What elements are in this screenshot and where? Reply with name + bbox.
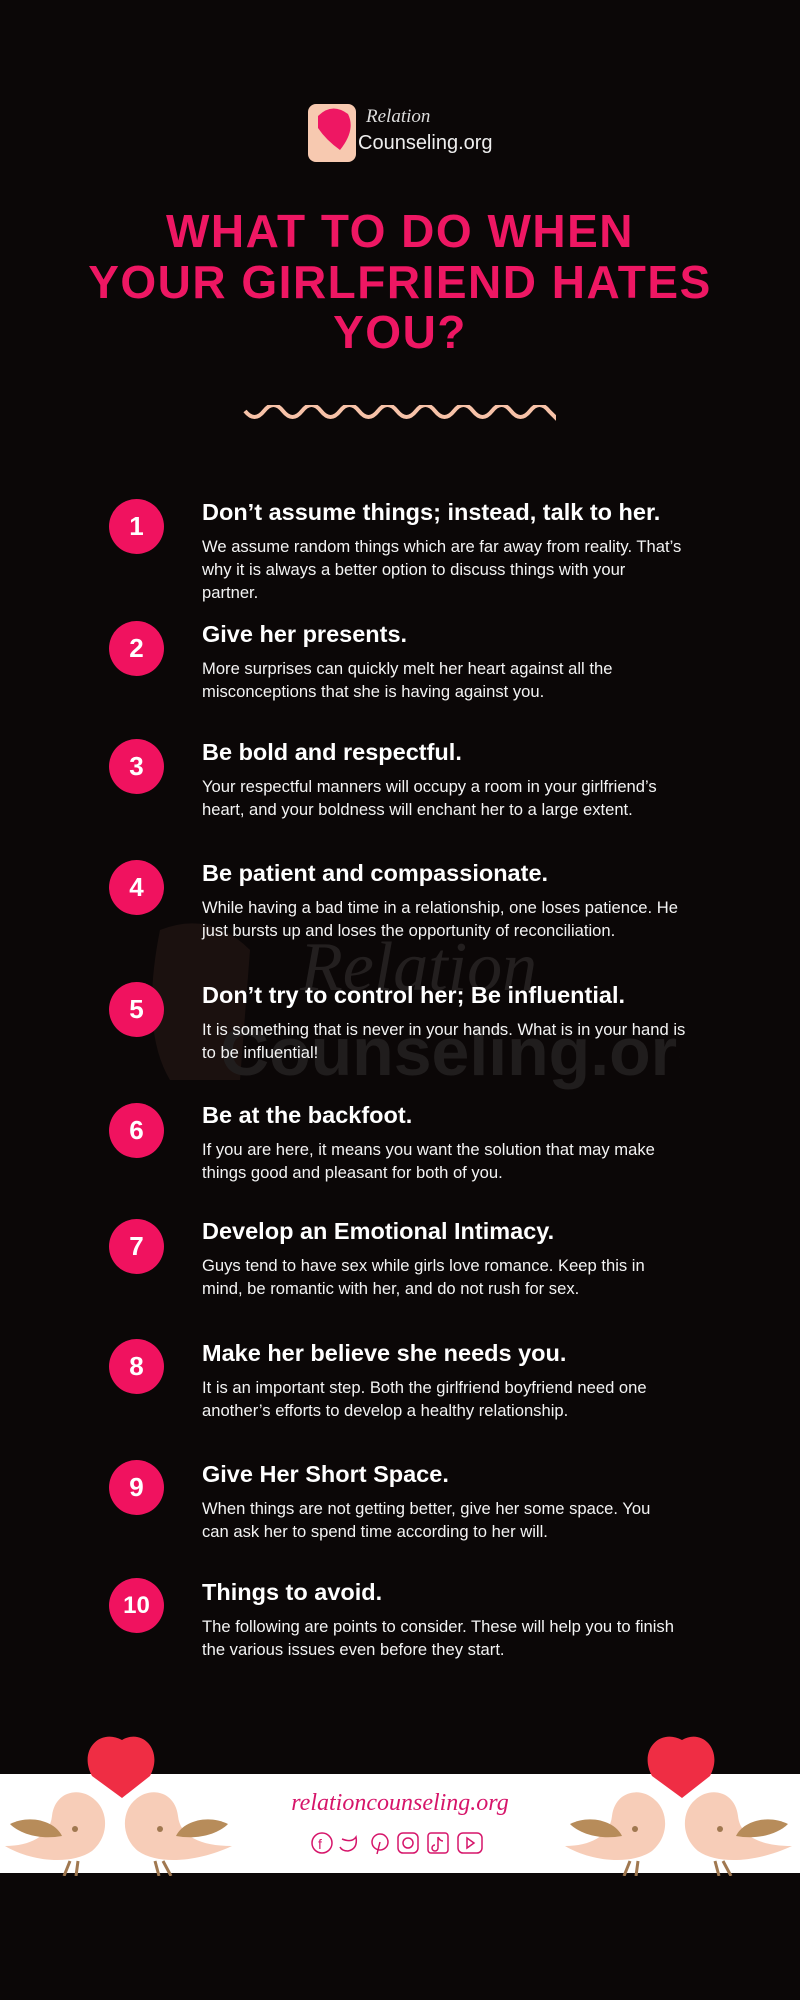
item 6: things good and pleasant for both of you. [202, 1163, 503, 1182]
item 9: 9 [129, 1472, 144, 1502]
watermark [152, 924, 680, 1090]
item 4: While having a bad time in a relationship, one loses patience. He [202, 898, 678, 917]
item 6: Be at the backfoot. [202, 1102, 412, 1128]
item 10: Things to avoid. [202, 1579, 382, 1605]
item 8 [109, 1339, 647, 1420]
item 5: It is something that is never in your hands. What is in your hand is [202, 1020, 685, 1039]
item 7 [109, 1218, 645, 1298]
logo: Relation [366, 106, 430, 127]
item 1: We assume random things which are far away from reality. That’s [202, 537, 681, 556]
item 6: If you are here, it means you want the solution that may make [202, 1140, 655, 1159]
item 8: Make her believe she needs you. [202, 1340, 566, 1366]
item 1: why it is always a better option to discuss things with your [202, 560, 625, 579]
item 4: Be patient and compassionate. [202, 860, 548, 886]
social icons: f [318, 1836, 322, 1852]
item 3: Your respectful manners will occupy a room in your girlfriend’s [202, 777, 657, 796]
item 2: 2 [129, 633, 144, 663]
item 5: 5 [129, 994, 144, 1024]
item 10: The following are points to consider. These will help you to finish [202, 1617, 674, 1636]
wave divider [244, 405, 556, 421]
title: YOUR GIRLFRIEND HATES [88, 256, 712, 308]
logo [308, 104, 493, 162]
item 3 [109, 739, 657, 819]
item 4: just bursts up and loses the opportunity of reconciliation. [202, 921, 615, 940]
title: WHAT TO DO WHEN [166, 205, 634, 257]
item 7: Guys tend to have sex while girls love romance. Keep this in [202, 1256, 645, 1275]
watermark: Relation [299, 929, 537, 1006]
birds right [565, 1736, 792, 1876]
item 2: More surprises can quickly melt her heart against all the [202, 659, 612, 678]
item 7: 7 [129, 1231, 144, 1261]
item 1: 1 [129, 511, 144, 541]
item 3: heart, and your boldness will enchant her to a large extent. [202, 800, 633, 819]
item 2: Give her presents. [202, 621, 407, 647]
footer website: relationcounseling.org [291, 1790, 509, 1816]
item 6: 6 [129, 1115, 144, 1145]
item 2: misconceptions that she is having against you. [202, 682, 544, 701]
item 1 [109, 499, 681, 602]
logo: Counseling.org [358, 132, 493, 154]
item 10: 10 [123, 1592, 150, 1619]
item 7: mind, be romantic with her, and do not rush for sex. [202, 1279, 579, 1298]
item 4: 4 [129, 872, 144, 902]
item 1: Don’t assume things; instead, talk to her. [202, 499, 660, 525]
item 4 [109, 860, 678, 940]
item 6 [109, 1102, 655, 1182]
item 8: It is an important step. Both the girlfriend boyfriend need one [202, 1378, 647, 1397]
item 5 [109, 982, 685, 1062]
item 9 [109, 1460, 650, 1541]
item 1: partner. [202, 583, 258, 602]
item 8: 8 [129, 1351, 144, 1381]
title [88, 205, 712, 358]
item 9: Give Her Short Space. [202, 1461, 449, 1487]
social icons [311, 1832, 483, 1854]
item 10 [109, 1578, 674, 1659]
item 7: Develop an Emotional Intimacy. [202, 1218, 554, 1244]
item 2 [109, 621, 612, 701]
item 3: 3 [129, 751, 144, 781]
item 9: can ask her to spend time according to her will. [202, 1522, 548, 1541]
item 5: to be influential! [202, 1043, 318, 1062]
item 9: When things are not getting better, give her some space. You [202, 1499, 650, 1518]
item 3: Be bold and respectful. [202, 739, 462, 765]
footer band [0, 1774, 800, 1873]
birds left [5, 1736, 232, 1876]
item 10: the various issues even before they start. [202, 1640, 505, 1659]
item 8: another’s efforts to develop a healthy relationship. [202, 1401, 568, 1420]
title: YOU? [333, 306, 467, 358]
item 5: Don’t try to control her; Be influential. [202, 982, 625, 1008]
